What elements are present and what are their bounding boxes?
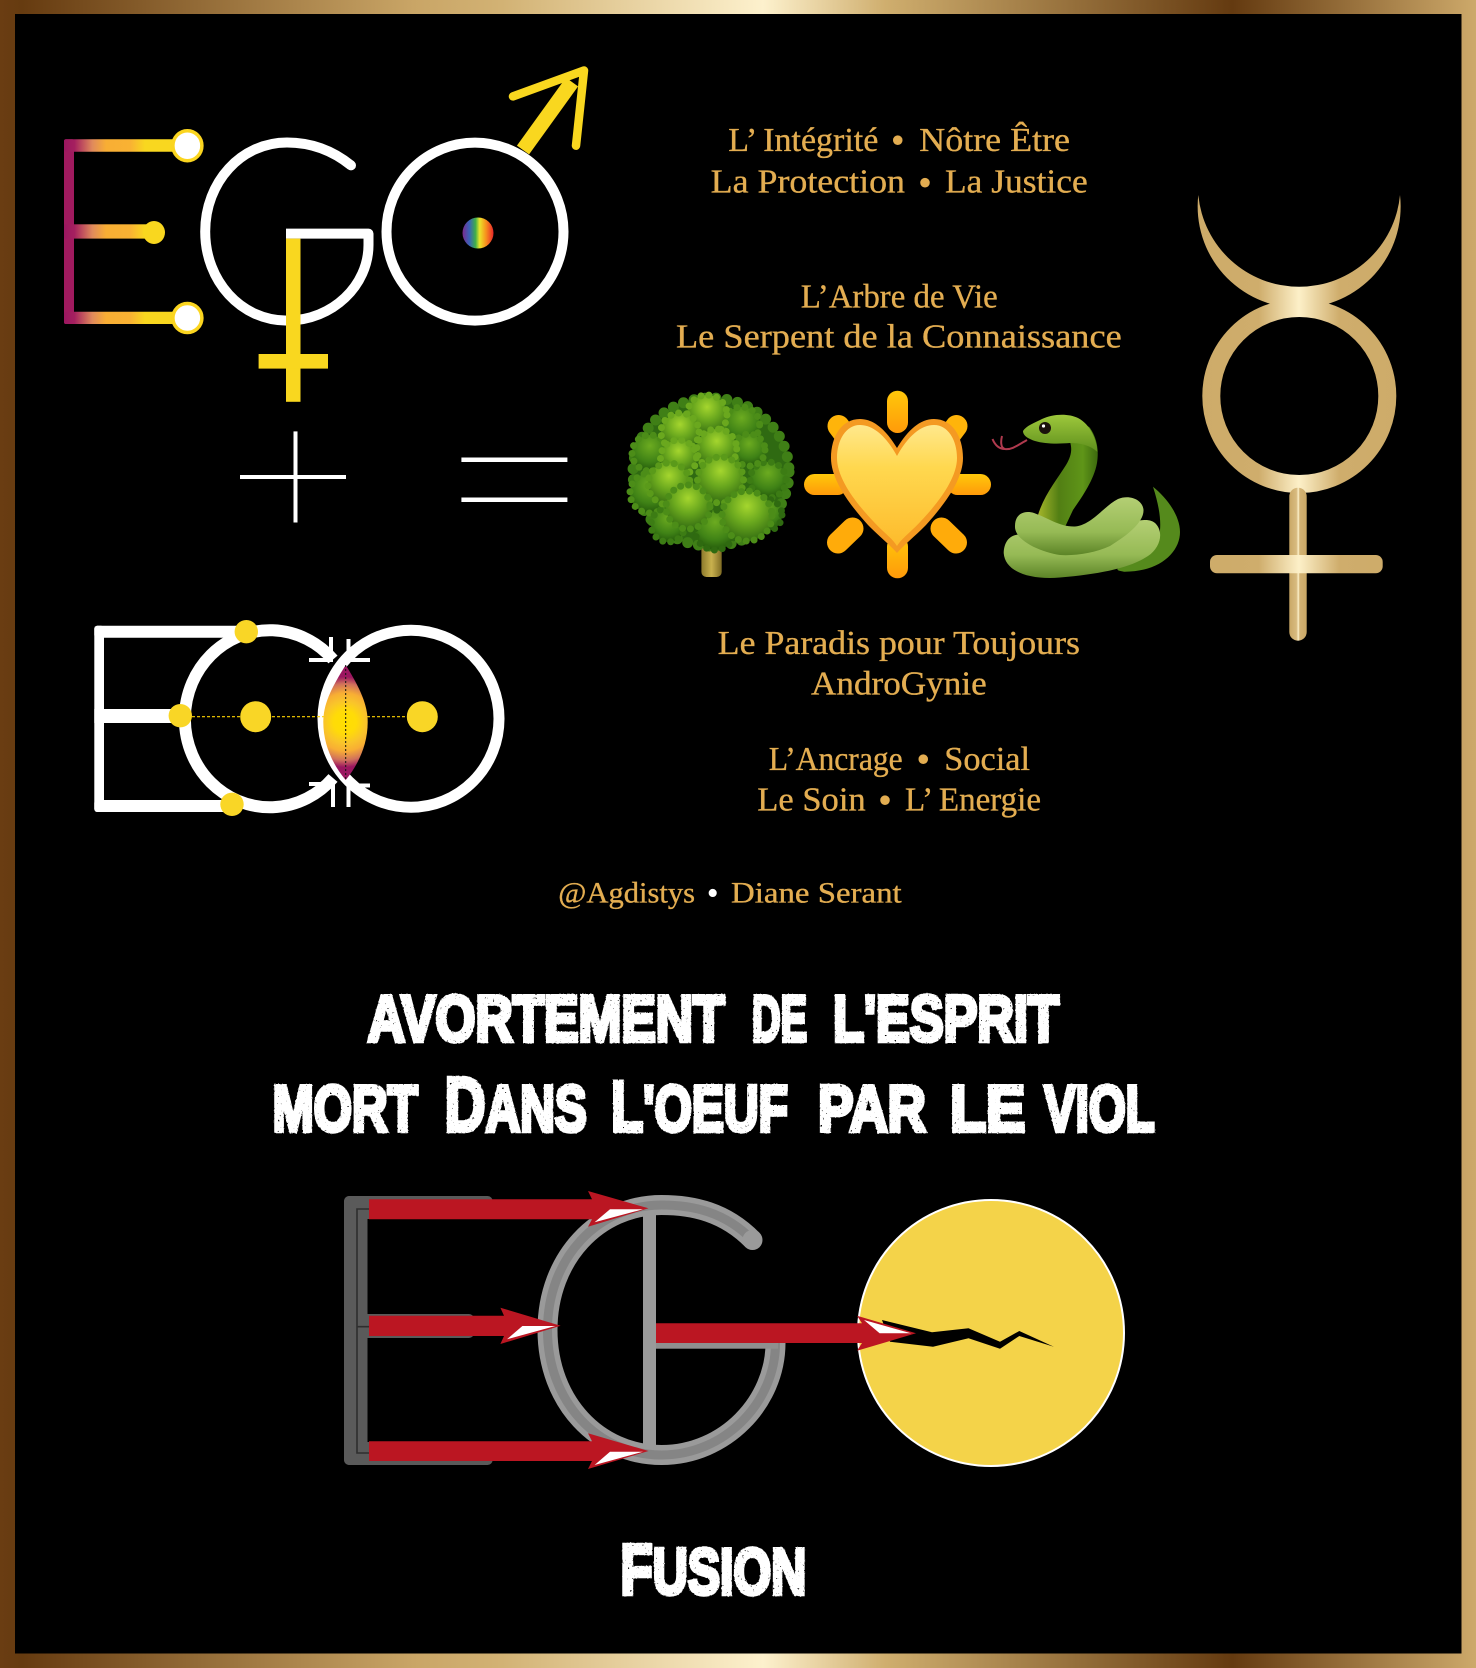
gray letter E — [344, 1196, 493, 1465]
yellow dots — [169, 620, 438, 816]
letter O with arrows — [323, 630, 499, 807]
diagram: pierced EGO — [344, 1191, 1124, 1469]
heading: two lines: MORT — [273, 1072, 418, 1145]
cross bar — [1210, 555, 1383, 573]
heading: two lines: L'ESPRIT — [833, 982, 1059, 1055]
text block: paradise: Le Paradis pour Toujours — [718, 625, 1080, 662]
credit line: Diane Serant — [731, 877, 902, 910]
text block: integrity: La Protection — [711, 163, 905, 200]
text block: integrity — [711, 117, 1088, 205]
red arrow: top — [369, 1191, 648, 1227]
letter E with gradient — [64, 131, 202, 332]
heading: two lines: DE — [752, 982, 807, 1055]
text block: anchoring: Le Soin — [757, 782, 866, 819]
heading: two lines: PAR — [818, 1072, 926, 1145]
text block: integrity: Nôtre Être — [919, 122, 1070, 159]
heading: two lines: VIOL — [1044, 1072, 1155, 1145]
equals sign — [461, 458, 567, 502]
text block: tree of life: L’Arbre de Vie — [801, 278, 998, 315]
credit line — [558, 875, 902, 912]
mercury symbol — [1198, 195, 1401, 641]
caption: Fusion: FUSION — [620, 1531, 806, 1610]
logo: EGO with gender symbols — [64, 70, 584, 402]
heading: two lines: L'OEUF — [611, 1068, 788, 1147]
text block: anchoring: L’ Energie — [905, 782, 1041, 819]
heading: two lines: DANS — [445, 1062, 587, 1148]
text block: paradise — [718, 625, 1080, 703]
lens intersection — [323, 665, 368, 780]
heading: two lines — [273, 982, 1155, 1148]
male symbol arrow — [513, 70, 584, 150]
gray letter G — [548, 1205, 778, 1455]
text block: integrity: • — [918, 160, 932, 205]
text block: anchoring: • — [878, 777, 892, 822]
icon: green snake — [992, 415, 1180, 578]
red arrow: into yolk — [656, 1316, 916, 1351]
plus sign — [240, 431, 346, 522]
credit line: @Agdistys — [558, 877, 695, 910]
red arrow: middle — [369, 1308, 561, 1344]
rainbow dot — [462, 218, 494, 248]
vertical dotted line — [345, 665, 347, 780]
text block: anchoring: L’Ancrage — [769, 741, 903, 778]
icon: radiant yellow heart — [804, 391, 991, 578]
letter G — [205, 142, 368, 321]
crack — [882, 1320, 1054, 1349]
dashed centre line — [192, 716, 420, 718]
letter C arc with arrows — [185, 630, 333, 807]
text block: integrity: L’ Intégrité — [728, 122, 878, 159]
ring — [1211, 308, 1387, 484]
credit line: • — [707, 875, 719, 912]
crescent — [1198, 195, 1401, 308]
letter E — [94, 626, 246, 812]
text block: anchoring: • — [916, 736, 930, 781]
text block: anchoring — [757, 736, 1041, 822]
diagram: ECO fusion — [94, 620, 499, 816]
heading: two lines: AVORTEMENT — [368, 982, 724, 1055]
female symbol — [259, 239, 328, 402]
text block: tree of life — [676, 278, 1122, 356]
icon: tree — [630, 395, 789, 577]
letter O — [386, 143, 564, 321]
heading: two lines: LE — [950, 1072, 1025, 1145]
stem — [1289, 488, 1307, 641]
text block: integrity: La Justice — [945, 163, 1088, 200]
text block: tree of life: Le Serpent de la Connaissance — [676, 319, 1122, 356]
text block: integrity: • — [891, 117, 905, 162]
red arrow: bottom — [369, 1433, 648, 1469]
yolk circle — [858, 1200, 1124, 1466]
text block: paradise: AndroGynie — [811, 666, 987, 703]
text block: anchoring: Social — [944, 741, 1030, 778]
